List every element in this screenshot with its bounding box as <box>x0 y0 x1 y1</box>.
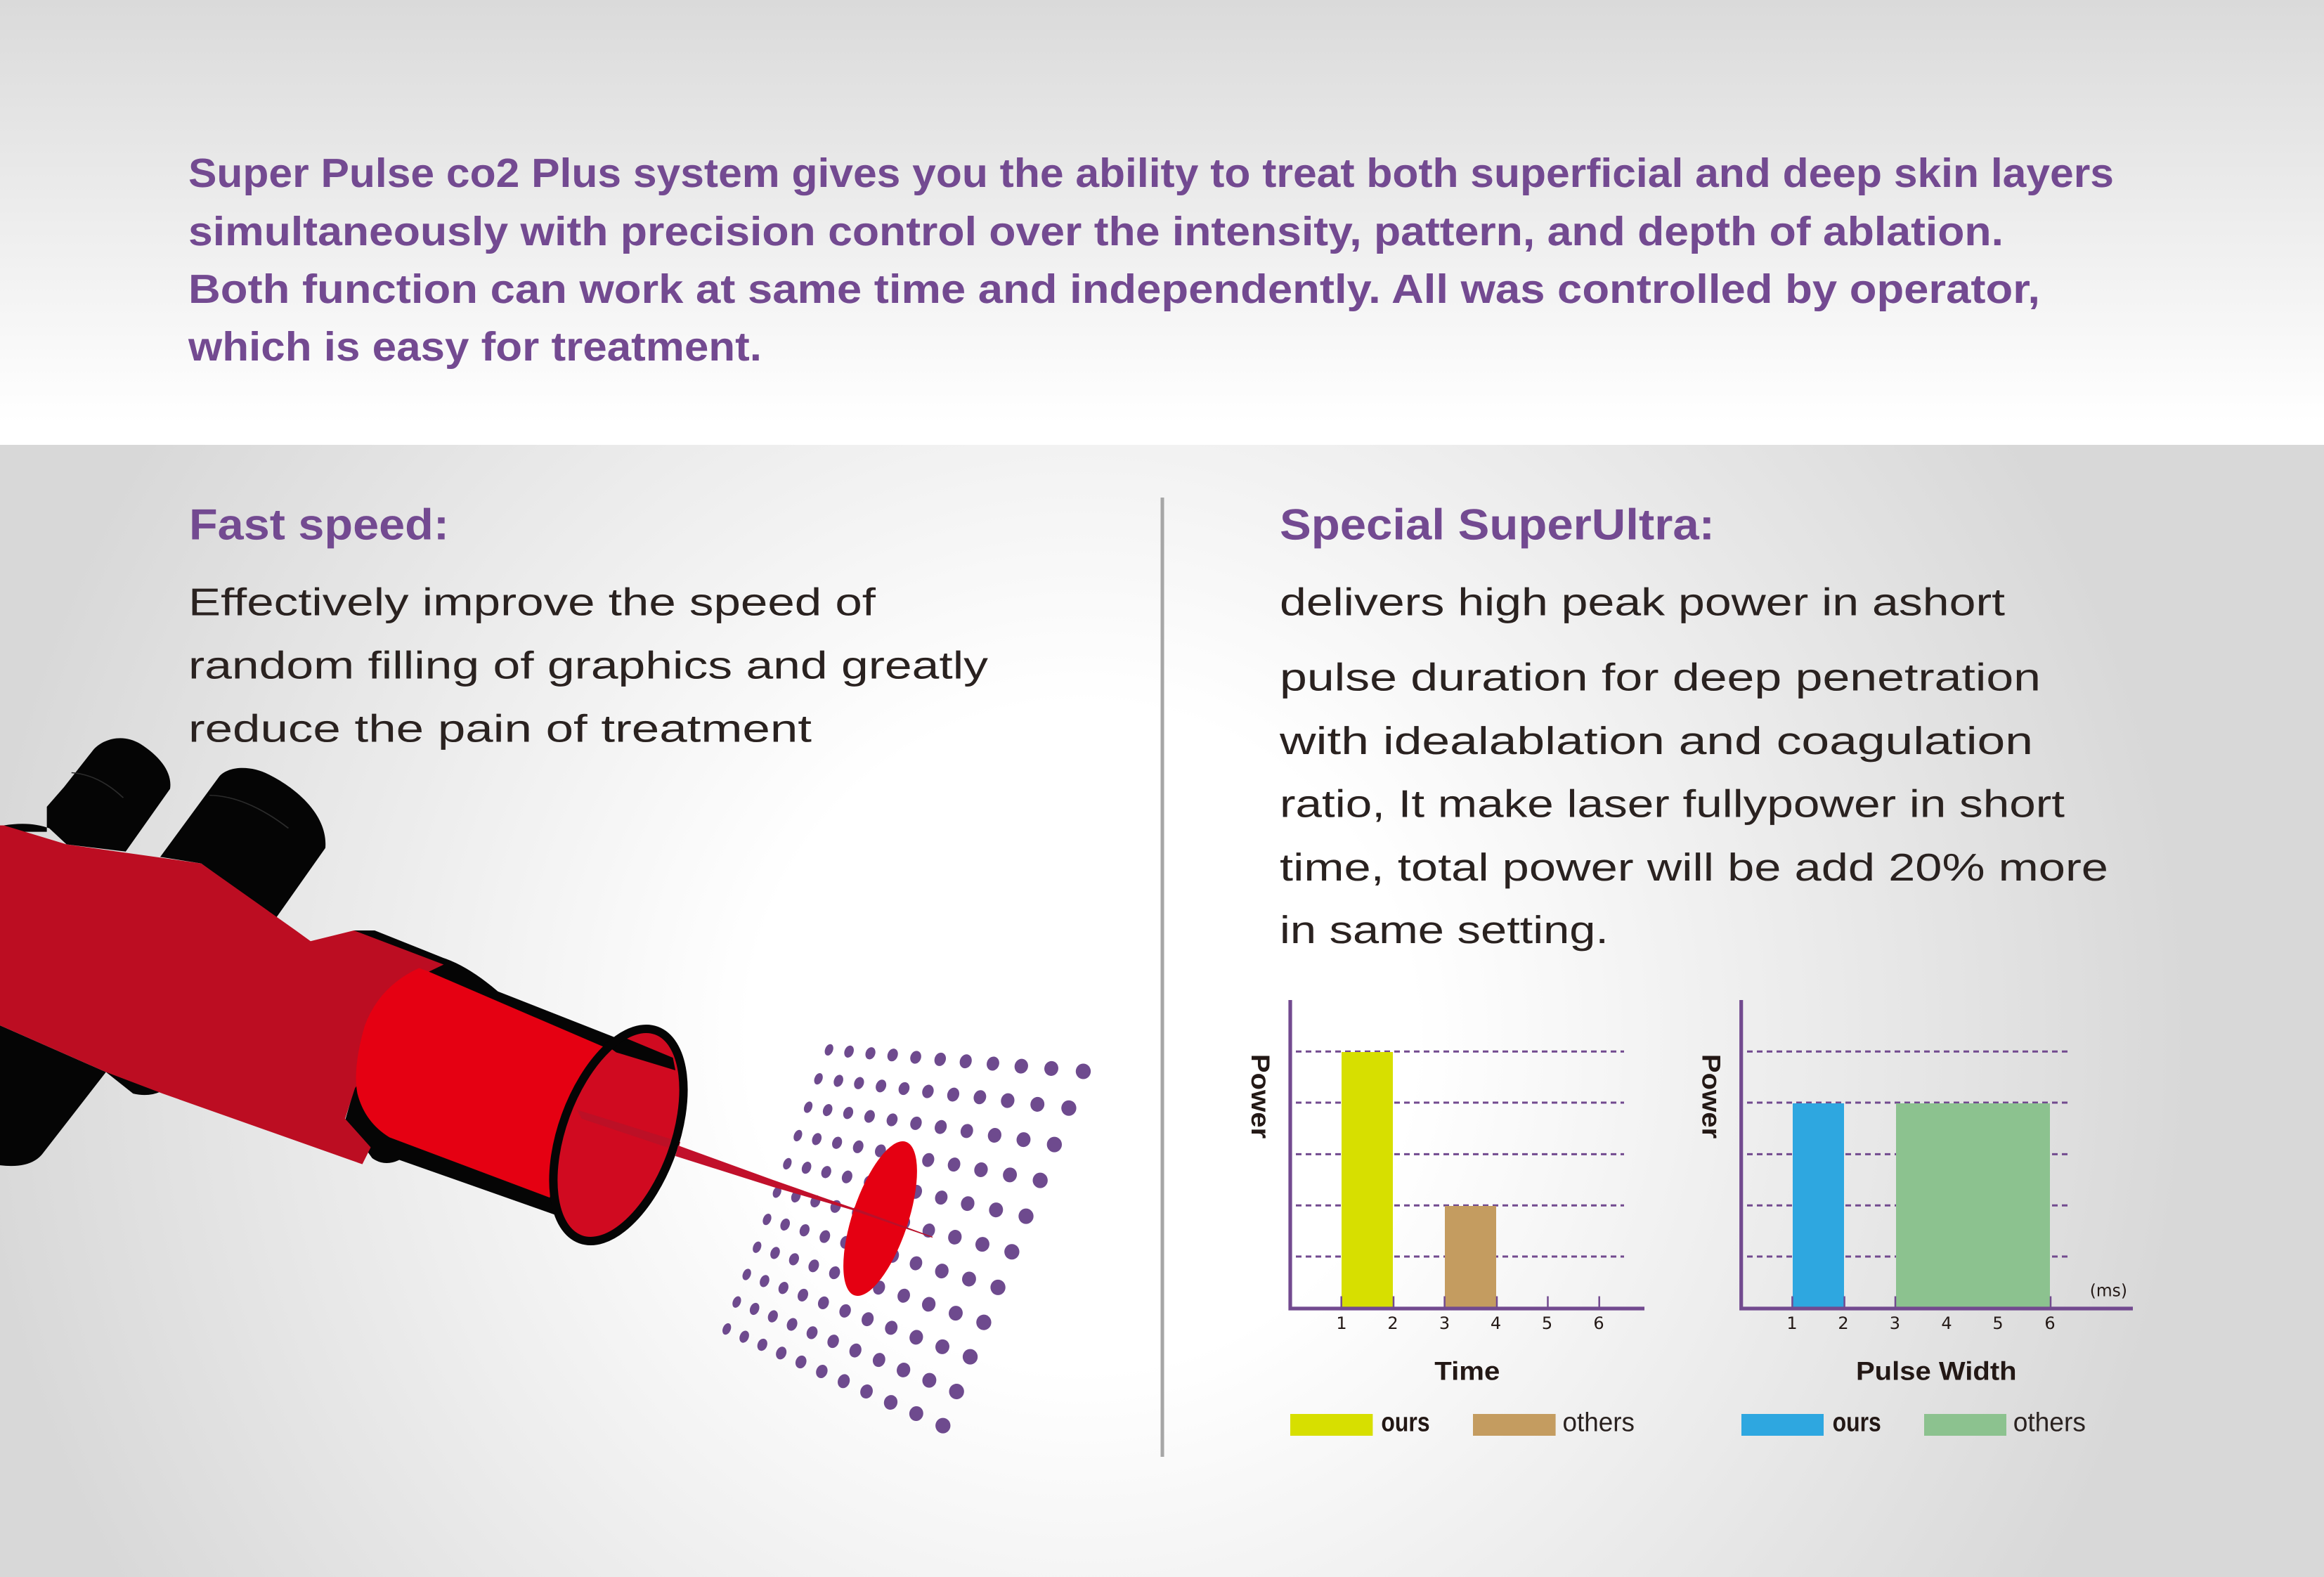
fast speed description: Effectively improve the speed of <box>188 580 876 624</box>
laser handpiece illustration <box>0 738 709 1259</box>
x tick labels: 6 <box>1593 1313 1604 1333</box>
legend: ours <box>1833 1408 1881 1438</box>
axes and ticks <box>1290 1000 1644 1309</box>
intro paragraph: Super Pulse co2 Plus system gives you the ability to treat both superficial and deep skin layers <box>188 150 2114 196</box>
black strip and beam inside opening <box>577 1036 680 1151</box>
fast speed description <box>188 580 989 751</box>
x tick labels: 3 <box>1890 1313 1900 1333</box>
x tick labels: 5 <box>1992 1313 2004 1333</box>
dashed grid lines <box>1747 1051 2072 1257</box>
laser beam <box>675 1146 855 1211</box>
handpiece black parts <box>0 738 680 1216</box>
superultra description: delivers high peak power in ashort <box>1280 580 2005 624</box>
top intro band background <box>0 0 2324 445</box>
legend: others <box>2013 1408 2086 1438</box>
x axis title: Pulse Width <box>1856 1357 2017 1386</box>
fast speed description: random filling of graphics and greatly <box>188 644 989 687</box>
bar: others <box>1445 1206 1496 1309</box>
legend <box>1290 1408 1635 1438</box>
handpiece bright red tube <box>356 968 604 1198</box>
lower section background <box>0 445 2324 1577</box>
y axis label: Power <box>1246 1054 1275 1138</box>
legend: ours <box>1381 1408 1430 1438</box>
bar: ours <box>1793 1103 1844 1309</box>
superultra description: time, total power will be add 20% more <box>1280 845 2108 889</box>
heading: fast speed: Fast speed: <box>189 500 449 550</box>
x tick labels: 4 <box>1941 1313 1952 1333</box>
x tick labels: 4 <box>1491 1313 1501 1333</box>
x tick labels: 3 <box>1439 1313 1450 1333</box>
intro paragraph: which is easy for treatment. <box>188 324 762 370</box>
x tick labels: 1 <box>1336 1313 1347 1333</box>
axes and ticks <box>1741 1000 2133 1309</box>
black ring of tube opening <box>528 1011 709 1259</box>
intro paragraph: Both function can work at same time and independently. All was controlled by operator, <box>188 266 2040 312</box>
x tick labels: 6 <box>2044 1313 2056 1333</box>
unit label: (ms) <box>2090 1280 2127 1300</box>
superultra description: ratio, It make laser fullypower in short <box>1280 782 2065 826</box>
dashed grid lines <box>1296 1051 1624 1257</box>
intro paragraph: simultaneously with precision control over the intensity, pattern, and depth of ablation. <box>188 209 2004 254</box>
beam passing through spot <box>855 1209 933 1237</box>
x tick labels: 2 <box>1387 1313 1398 1333</box>
superultra description: in same setting. <box>1280 908 1609 952</box>
tube opening interior <box>528 1011 709 1259</box>
x tick labels <box>1786 1313 2056 1333</box>
superultra description: pulse duration for deep penetration <box>1280 656 2041 699</box>
handpiece dark red body <box>0 825 443 1164</box>
x axis title: Time <box>1434 1357 1500 1386</box>
panel: fast speed text <box>188 500 989 751</box>
superultra description <box>1279 580 2108 952</box>
x tick labels: 2 <box>1838 1313 1849 1333</box>
x tick labels <box>1336 1313 1604 1333</box>
bar chart: power over pulse width <box>1696 1000 2133 1438</box>
x tick labels: 1 <box>1786 1313 1798 1333</box>
intro paragraph <box>188 150 2114 370</box>
legend: others <box>1563 1408 1635 1438</box>
fast speed description: reduce the pain of treatment <box>188 707 812 751</box>
legend <box>1741 1408 2086 1438</box>
center divider <box>1161 498 1164 1457</box>
y axis label: Power <box>1696 1054 1725 1138</box>
heading: special superultra: Special SuperUltra: <box>1280 500 1715 550</box>
bar: ours <box>1342 1052 1393 1309</box>
x tick labels: 5 <box>1542 1313 1552 1333</box>
panel: special superultra text <box>1279 500 2108 952</box>
superultra description: with idealablation and coagulation <box>1279 719 2033 762</box>
bar chart: power over time <box>1246 1000 1644 1438</box>
bar: others <box>1896 1103 2050 1309</box>
dot pattern target <box>721 1043 1093 1436</box>
red laser spot <box>828 1133 933 1304</box>
